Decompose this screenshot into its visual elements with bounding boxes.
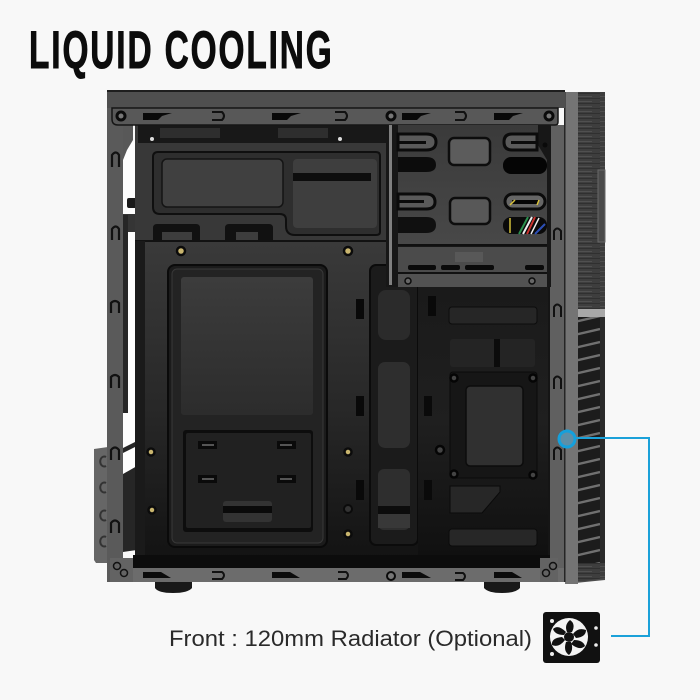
recess window (181, 277, 313, 415)
front vent fins (578, 317, 601, 563)
top panel (107, 90, 565, 108)
expansion bracket (94, 447, 108, 563)
lower plate (183, 430, 313, 532)
front panel (564, 92, 605, 584)
drive cage (386, 125, 551, 287)
callout connector line (575, 438, 649, 636)
PSU vent slots (153, 224, 273, 240)
feet (155, 582, 520, 593)
computer case (94, 90, 605, 593)
rear frame (107, 90, 138, 582)
right pillar (538, 125, 564, 582)
bottom rail (110, 558, 564, 582)
cage vent slots (408, 265, 544, 270)
tray recess (168, 265, 327, 547)
brushed lower front (578, 563, 605, 582)
white gap behind rear frame (123, 140, 137, 540)
icon: radiator fan (543, 612, 600, 663)
radiator label: Front : 120mm Radiator (Optional) (169, 626, 532, 651)
top rail (112, 108, 558, 125)
callout marker dot (559, 431, 575, 447)
upper compartment wall (135, 125, 387, 243)
bottom corner plates (110, 558, 558, 582)
vertical recess column (370, 265, 418, 545)
tray mounting slots (356, 299, 364, 500)
drive bay holes (398, 134, 547, 234)
tray screws (148, 247, 352, 538)
motherboard tray (135, 241, 419, 557)
bottom dark channel (133, 555, 550, 569)
brushed upper front (578, 92, 605, 309)
PSU recess (153, 152, 380, 235)
right drive bay area (418, 287, 550, 557)
title: LIQUID COOLING (29, 21, 334, 80)
